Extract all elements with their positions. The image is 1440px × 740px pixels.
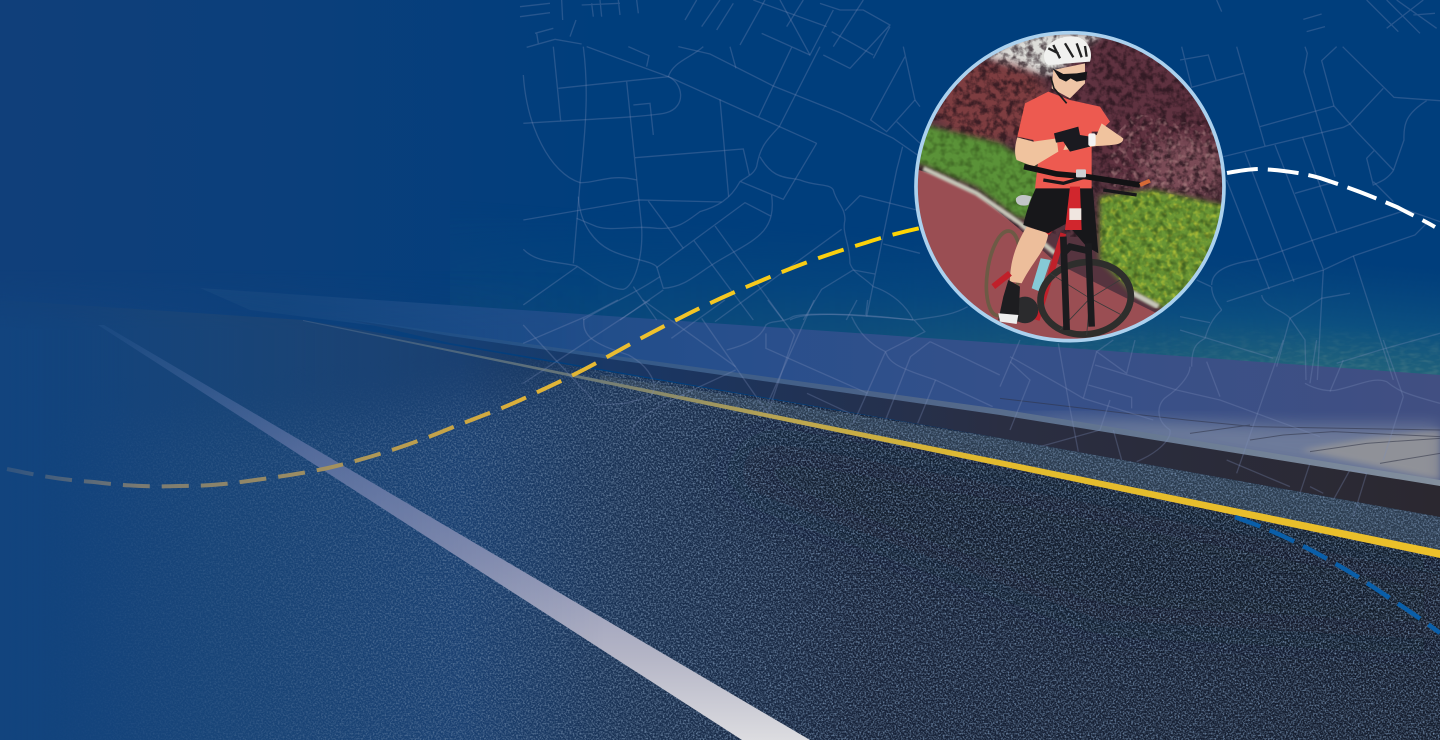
map: right side <box>1180 0 1440 380</box>
photo: jersey <box>1017 92 1110 188</box>
photo: right bush <box>1058 36 1209 174</box>
sidewalk <box>200 288 1440 483</box>
photo: watch <box>1088 133 1096 146</box>
photo: circle border <box>916 33 1224 341</box>
photo: shorts <box>1023 187 1098 253</box>
photo: head tube <box>1065 187 1082 230</box>
yellow road line <box>303 320 1440 558</box>
photo: neck and face <box>1052 63 1085 98</box>
photo: sunglasses <box>1053 68 1087 82</box>
photo: handlebar <box>1024 167 1140 185</box>
curb top edge <box>350 319 1440 486</box>
photo: helmet strap <box>1051 77 1067 103</box>
asphalt grain <box>105 361 1440 740</box>
curb <box>350 320 1440 517</box>
photo: helmet <box>1044 36 1091 65</box>
photo: legs <box>1010 227 1048 283</box>
photo: arms <box>1015 137 1058 167</box>
photo: rear wheel <box>984 229 1020 318</box>
road surface <box>0 300 1440 740</box>
photo: green speckle <box>1100 191 1221 308</box>
photo: crank <box>1018 296 1038 324</box>
photo: bottle <box>1032 258 1051 292</box>
photo: shoe <box>998 280 1020 322</box>
white road line <box>98 325 810 740</box>
map: over sidewalk and road, left part <box>523 300 1000 433</box>
road shadow <box>720 440 1440 640</box>
photo: fork <box>1063 237 1092 330</box>
photo: sky <box>983 33 1107 77</box>
photo: bike frame <box>992 230 1066 321</box>
sidewalk light paving <box>1031 411 1440 480</box>
photo: red bike path <box>913 168 1157 347</box>
photo: right greenery <box>1100 190 1230 310</box>
photo: left green shading <box>920 126 1036 218</box>
paving joints <box>1000 398 1440 463</box>
photo: foliage shadow texture <box>913 30 1227 237</box>
photo: front wheel <box>1036 256 1136 340</box>
photo: cyclist in circle <box>913 30 1233 347</box>
photo: left bush <box>932 62 1048 142</box>
photo: flower speckle <box>1108 114 1222 198</box>
route: white dashed line <box>1227 169 1435 227</box>
photo: left greenery <box>913 120 1040 220</box>
grass strip behind sidewalk <box>596 287 1440 375</box>
route: yellow dashed line <box>7 228 920 486</box>
map: central network <box>520 0 920 322</box>
map: over sidewalk and curb, right part <box>1000 340 1440 517</box>
left fade overlay <box>32 320 548 740</box>
photo: path edge <box>923 168 1055 253</box>
photo: gloves <box>1054 127 1090 152</box>
photo: flowers <box>1140 138 1227 195</box>
route: blue dashed line <box>1235 517 1440 633</box>
photo: wheel spokes <box>1050 273 1122 335</box>
photo: seat <box>1016 195 1032 206</box>
sunlit paving slabs <box>1300 430 1440 480</box>
photo scene clipped to circle <box>913 30 1233 347</box>
street map lines <box>520 0 1440 517</box>
lighter road band along curb <box>600 375 1440 553</box>
